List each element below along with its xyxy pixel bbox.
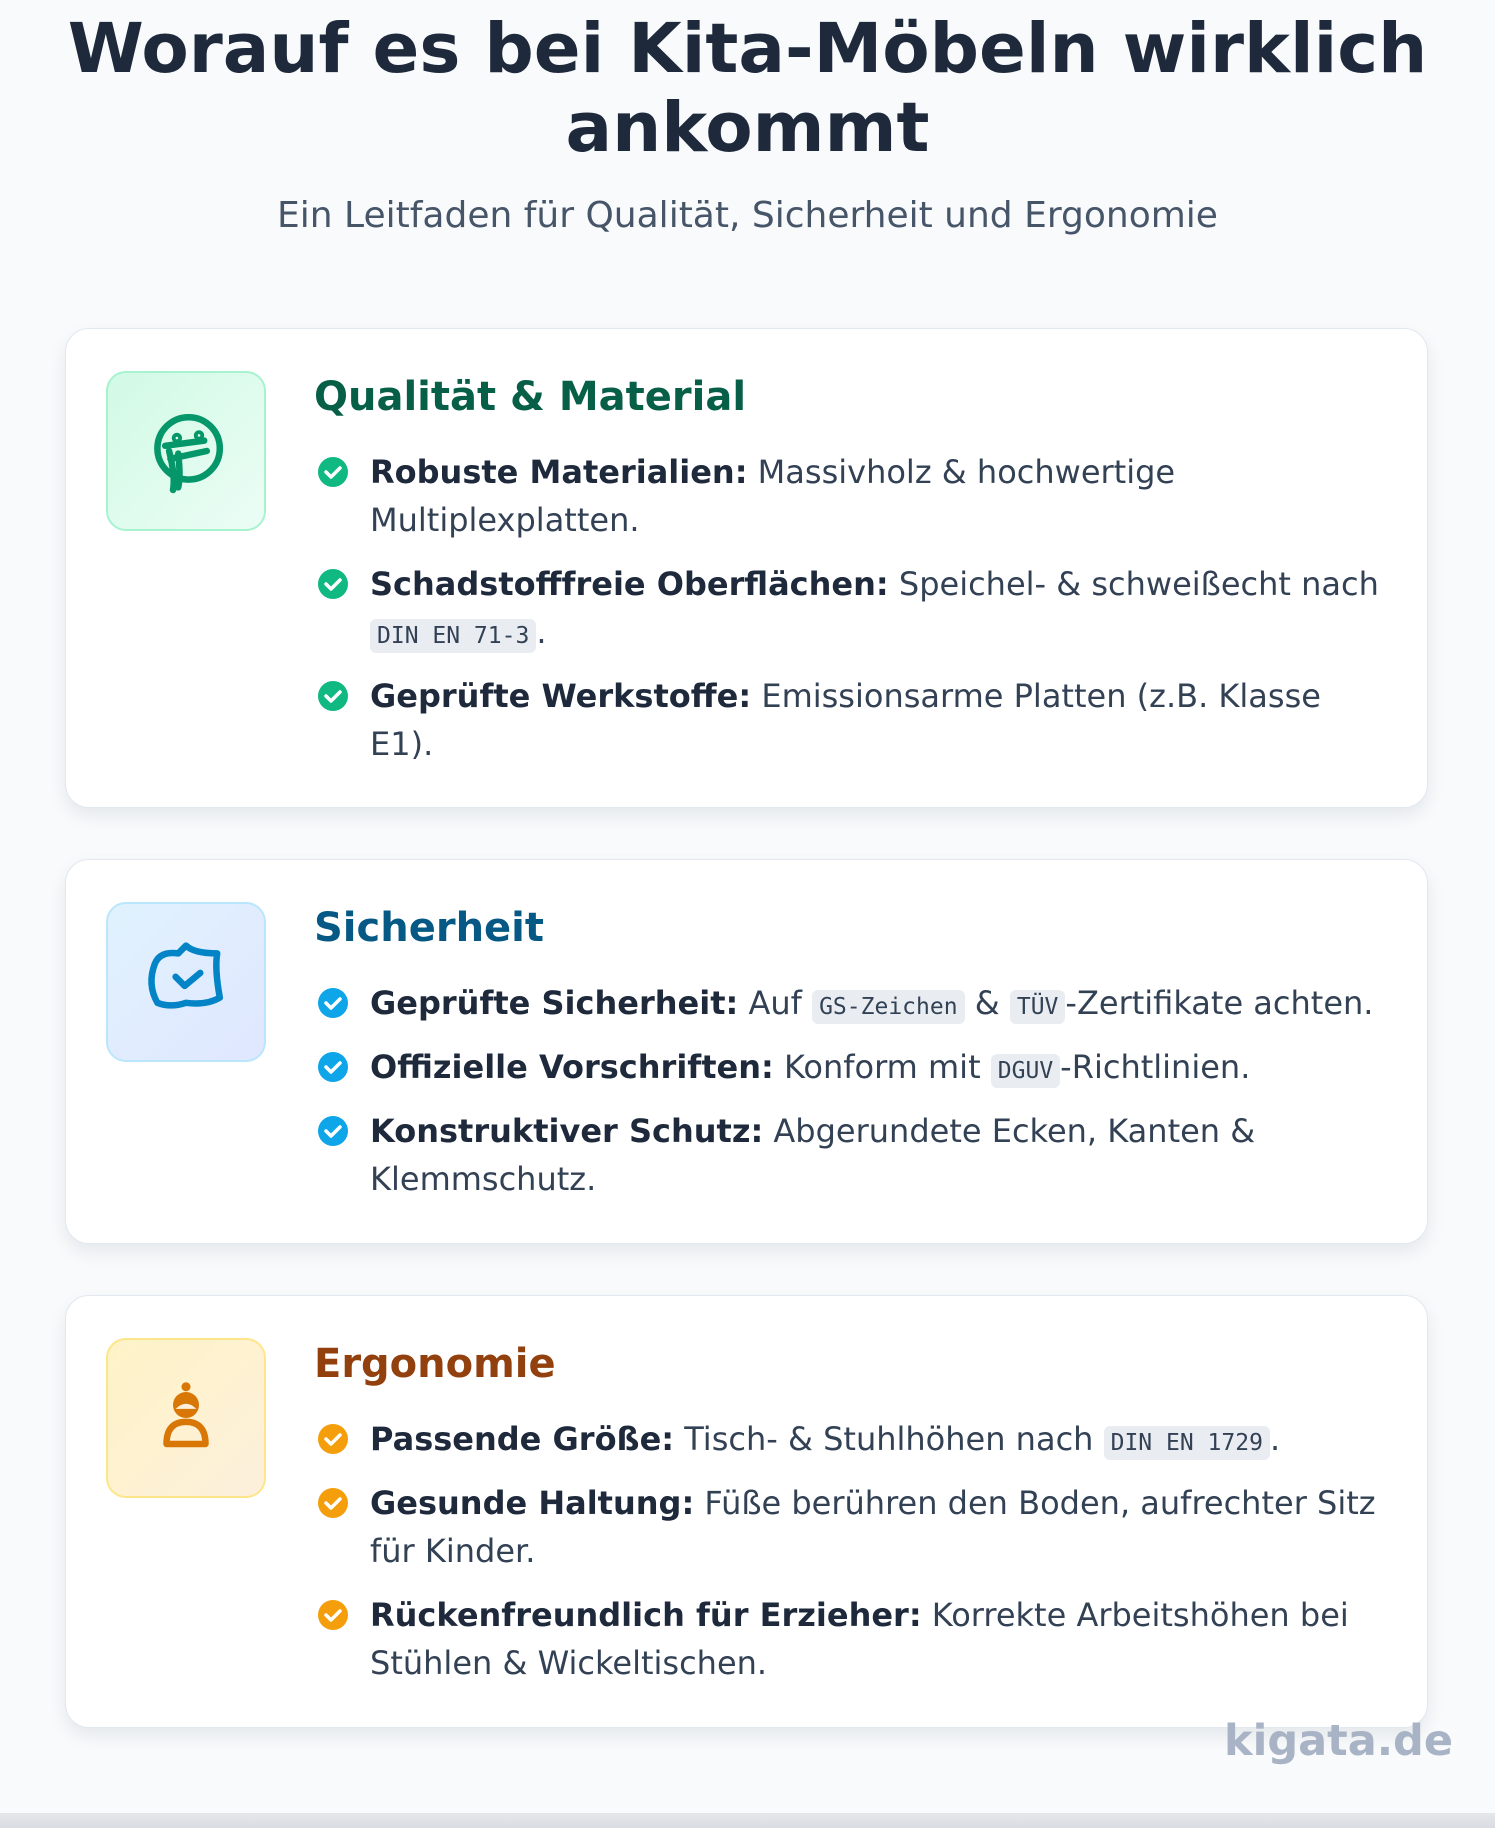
icon: shield: [106, 902, 266, 1062]
panel: Sicherheit: [65, 859, 1428, 1244]
bullet list: Geprüfte Sicherheit: Auf GS-Zeichen & TÜV-Zertifikate achten.: [370, 984, 1373, 1022]
bullet list: Rückenfreundlich für Erzieher: Korrekte Arbeitshöhen bei Stühlen & Wickeltischen.: [370, 1596, 1349, 1682]
heading: Sicherheit: [314, 905, 544, 951]
subtitle: Ein Leitfaden für Qualität, Sicherheit und Ergonomie: [277, 195, 1218, 236]
bullet list: [318, 453, 1379, 763]
panel: Qualität & Material: [65, 328, 1428, 808]
heading: Qualität & Material: [314, 374, 746, 420]
bullet list: Robuste Materialien: Massivholz & hochwertige Multiplexplatten.: [370, 453, 1175, 539]
heading: Ergonomie: [314, 1341, 556, 1387]
bullet list: [318, 1420, 1376, 1682]
bullet list: Offizielle Vorschriften: Konform mit DGUV-Richtlinien.: [370, 1048, 1250, 1086]
bullet list: Konstruktiver Schutz: Abgerundete Ecken, Kanten & Klemmschutz.: [370, 1112, 1255, 1198]
bullet list: Gesunde Haltung: Füße berühren den Boden, aufrechter Sitz für Kinder.: [370, 1484, 1376, 1570]
bullet list: Schadstofffreie Oberflächen: Speichel- & schweißecht nach DIN EN 71-3.: [370, 565, 1379, 651]
bullet list: Geprüfte Werkstoffe: Emissionsarme Platten (z.B. Klasse E1).: [370, 677, 1321, 763]
panel: Ergonomie: [65, 1295, 1428, 1728]
icon: material: [106, 371, 266, 531]
title: Worauf es bei Kita-Möbeln wirklich: [68, 9, 1427, 89]
title: ankommt: [566, 88, 929, 168]
bullet list: Passende Größe: Tisch- & Stuhlhöhen nach DIN EN 1729.: [370, 1420, 1280, 1458]
bullet list: [318, 984, 1373, 1198]
icon: child: [106, 1338, 266, 1498]
title: [68, 9, 1427, 168]
watermark: kigata.de: [1224, 1716, 1453, 1766]
